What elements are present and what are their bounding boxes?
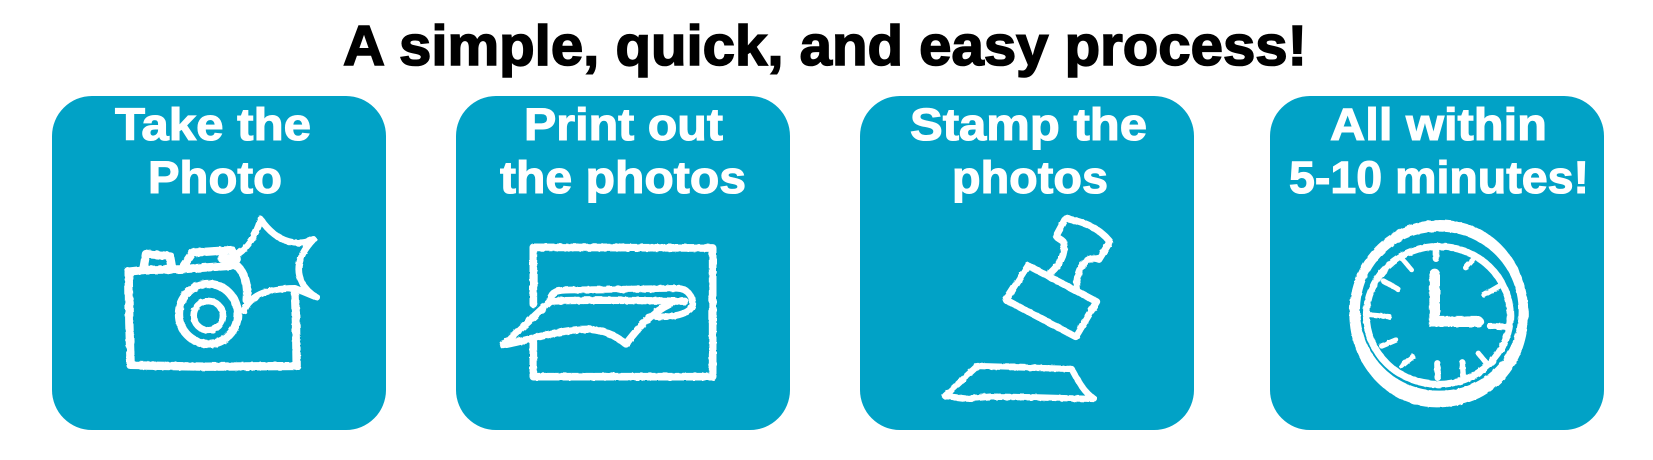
heading: stamp the photos: photos	[952, 152, 1108, 203]
title: A simple, quick, and easy process!	[343, 14, 1307, 78]
icon: printed photo sheet	[503, 247, 713, 377]
panel: print out the photos	[456, 96, 790, 430]
icon: rubber stamp over paper	[945, 218, 1110, 399]
heading: take the photo: Take the	[115, 99, 311, 150]
panel: take the photo	[52, 96, 386, 430]
heading: print out the photos: Print out	[524, 99, 723, 150]
heading: take the photo	[115, 99, 311, 203]
heading: stamp the photos	[910, 99, 1147, 203]
panel: stamp the photos	[860, 96, 1194, 430]
heading: all within 5-10 minutes	[1289, 99, 1589, 203]
panel background	[52, 96, 386, 430]
heading: all within 5-10 minutes: All within	[1330, 99, 1547, 150]
heading: print out the photos: the photos	[500, 152, 746, 203]
panel background	[1270, 96, 1604, 430]
panel background	[456, 96, 790, 430]
panel background	[860, 96, 1194, 430]
heading: stamp the photos: Stamp the	[910, 99, 1147, 150]
heading: print out the photos	[500, 99, 746, 203]
icon: camera with flash	[129, 219, 317, 367]
panel: all within 5-10 minutes	[1270, 96, 1604, 430]
icon: clock	[1349, 220, 1528, 407]
heading: take the photo: Photo	[148, 152, 282, 203]
heading: all within 5-10 minutes: 5-10 minutes!	[1289, 152, 1589, 203]
